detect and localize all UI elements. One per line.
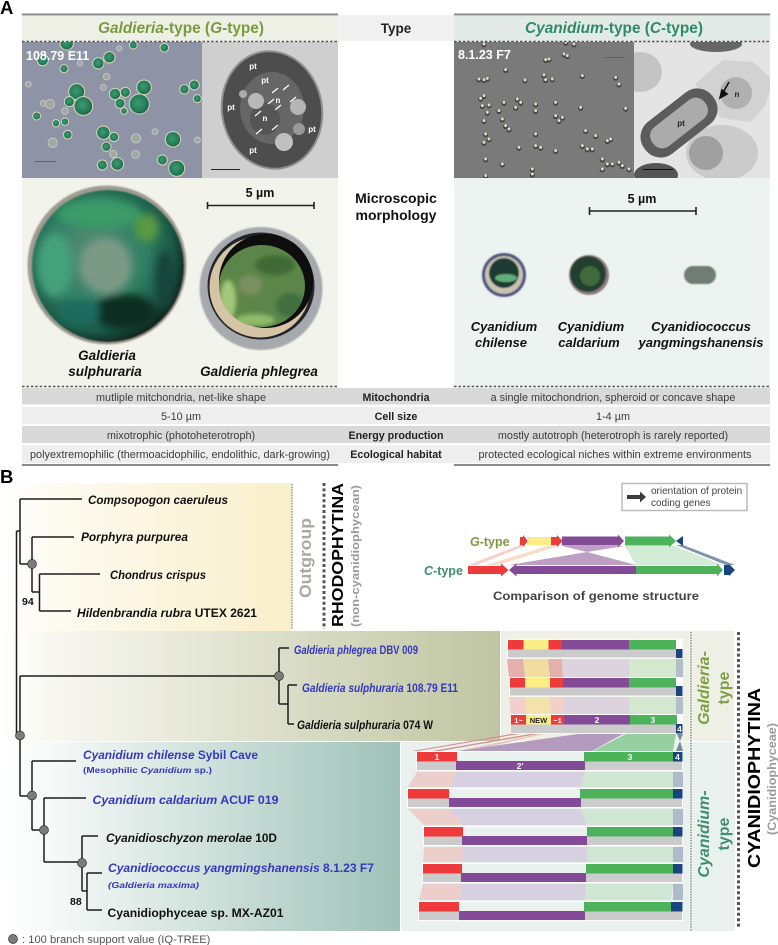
TEM: Galdieria cell: pt bbox=[308, 125, 316, 134]
Galdieria row 3: NEW bbox=[530, 716, 548, 725]
Galdieria row 1 bbox=[507, 639, 683, 658]
species labels: Cyanidium caldarium ACUF 019 bbox=[92, 795, 278, 807]
row: ecological habitat: Ecological habitat bbox=[350, 449, 442, 461]
cell: Galdieria sulphuraria bbox=[28, 186, 186, 344]
C-type genome bbox=[468, 564, 735, 576]
panel B bbox=[0, 466, 778, 945]
species labels: Cyanidioschyzon merolae 10D bbox=[106, 833, 277, 845]
row: cell size: 5-10 µm bbox=[161, 411, 201, 423]
TEM: Galdieria cell: pt bbox=[227, 103, 235, 112]
row: cell size: Cell size bbox=[375, 411, 417, 423]
species labels: Compsopogon caeruleus bbox=[88, 495, 228, 507]
background: Galdieria clade bbox=[0, 631, 500, 741]
panel letter B: B bbox=[0, 466, 13, 487]
Cyanidium row 1 bbox=[416, 751, 683, 771]
species labels: (Galdieria maxima) bbox=[108, 880, 199, 890]
Type header bbox=[338, 15, 454, 41]
TEM: Galdieria cell: pt bbox=[249, 62, 257, 71]
C-type label: C-type bbox=[424, 564, 463, 578]
row: mitochondria: mutliple mitchondria, net-like shape bbox=[96, 392, 266, 404]
row: mitochondria: a single mitochondrion, spheroid or concave shape bbox=[491, 392, 735, 404]
comparison caption: Comparison of genome structure bbox=[493, 589, 699, 603]
Galdieria row 3: 4 bbox=[677, 724, 682, 734]
Galdieria row 2 bbox=[509, 677, 683, 696]
light micrograph: Galdieria 108.79 E11: 108.79 E11 bbox=[26, 49, 89, 63]
Cyanidium row 3 bbox=[423, 826, 683, 846]
TEM: Galdieria cell: pt bbox=[249, 146, 257, 155]
row: ecological habitat: protected ecological niches within extreme environments bbox=[478, 449, 752, 461]
TEM: Cyanidium cell bbox=[634, 42, 770, 178]
G-type label: G-type bbox=[470, 535, 510, 549]
row: energy production: mostly autotroph (heterotroph is rarely reported) bbox=[498, 430, 728, 442]
Galdieria row 3: 3 bbox=[651, 715, 656, 725]
species labels bbox=[77, 495, 459, 920]
legend: gene orientation: coding genes bbox=[651, 498, 710, 509]
light micrograph: Cyanidium 8.1.23 F7: 8.1.23 F7 bbox=[458, 48, 511, 62]
species labels: Hildenbrandia rubra UTEX 2621 bbox=[77, 608, 258, 620]
support values: 88 bbox=[70, 896, 82, 908]
scale bar 5 µm, Galdieria bbox=[208, 186, 314, 209]
label: CYANIDIOPHYTINA: CYANIDIOPHYTINA bbox=[744, 688, 764, 868]
row: energy production bbox=[107, 430, 728, 442]
label: non-cyanidiophycean: (non-cyanidiophycean) bbox=[350, 485, 362, 627]
label: Cyanidiococcus yangmingshanensis: yangmingshanensis bbox=[638, 335, 763, 350]
label: Galdieria phlegrea: Galdieria phlegrea bbox=[200, 364, 318, 379]
Galdieria row 3: 2 bbox=[595, 715, 600, 725]
label: Microscopic morphology: morphology bbox=[356, 207, 437, 223]
label: Cyanidium caldarium: Cyanidium bbox=[558, 319, 625, 334]
TEM: Galdieria cell: pt bbox=[261, 76, 269, 85]
background: outgroup bbox=[0, 483, 292, 631]
Cyanidium header: Cyanidium-type (C-type) bbox=[525, 20, 703, 37]
comparison table bbox=[22, 388, 770, 466]
background: Cyanidium clade bbox=[0, 742, 400, 931]
panel: Cyanidium morphology bbox=[454, 178, 770, 386]
label: Galdieria sulphuraria: sulphuraria bbox=[68, 364, 142, 379]
TEM: Cyanidium cell: pt bbox=[677, 119, 685, 128]
scale bar 5 µm, Cyanidium bbox=[590, 192, 696, 215]
label: Galdieria sulphuraria: Galdieria bbox=[78, 348, 136, 363]
support values: 94 bbox=[22, 596, 34, 608]
Galdieria header: Galdieria-type (G-type) bbox=[98, 20, 264, 37]
cell: Cyanidium chilense bbox=[482, 253, 526, 297]
genome synteny: Galdieria rows bbox=[507, 639, 683, 734]
species labels: Cyanidiococcus yangmingshanensis 8.1.23 F7 bbox=[108, 863, 374, 875]
row: ecological habitat bbox=[30, 449, 752, 461]
Cyanidium row 2 bbox=[407, 788, 683, 808]
scale bar 5 µm, Galdieria: 5 µm bbox=[246, 186, 274, 200]
Cyanidium row 5 bbox=[418, 901, 683, 921]
species labels: Cyanidiophyceae sp. MX-AZ01 bbox=[108, 908, 284, 920]
cell: Galdieria phlegrea bbox=[200, 227, 322, 350]
cell: Cyanidiococcus yangmingshanensis bbox=[684, 266, 716, 284]
label: type (Cyanidium): type bbox=[716, 817, 733, 850]
row: energy production: Energy production bbox=[348, 430, 444, 442]
Cyanidium row 1: 1 bbox=[435, 752, 440, 762]
Galdieria row 3: 1~ bbox=[514, 716, 523, 725]
row: energy production: mixotrophic (photoheterotroph) bbox=[107, 430, 255, 442]
species labels: Galdieria sulphuraria 074 W bbox=[297, 720, 433, 732]
legend: gene orientation: orientation of protein bbox=[651, 486, 742, 497]
species labels: Chondrus crispus bbox=[110, 570, 206, 582]
species labels: Porphyra purpurea bbox=[81, 532, 189, 544]
support values bbox=[22, 596, 82, 908]
label: type (Galdieria): type bbox=[716, 671, 733, 704]
Galdieria header bbox=[22, 14, 338, 41]
row: cell size bbox=[161, 411, 630, 423]
genome structure comparison bbox=[424, 534, 735, 603]
genome synteny: Cyanidium rows bbox=[407, 751, 683, 921]
species labels: Galdieria sulphuraria 108.79 E11 bbox=[302, 683, 459, 695]
legend: gene orientation bbox=[622, 484, 747, 510]
support nodes bbox=[16, 560, 284, 868]
ribbons bbox=[468, 545, 735, 565]
row: cell size: 1-4 µm bbox=[596, 411, 630, 423]
Type header: Type bbox=[381, 21, 412, 36]
label: Cyanidiococcus yangmingshanensis: Cyanidiococcus bbox=[651, 319, 751, 334]
cell: Cyanidium caldarium bbox=[569, 255, 609, 295]
label: Microscopic morphology: Microscopic bbox=[355, 190, 437, 206]
label: Cyanidium caldarium: caldarium bbox=[558, 335, 620, 350]
Cyanidium row 4 bbox=[422, 863, 683, 883]
G-type genome bbox=[520, 534, 683, 548]
label: RHODOPHYTINA: RHODOPHYTINA bbox=[330, 483, 347, 627]
panel: Galdieria morphology bbox=[22, 178, 338, 386]
species labels: (Mesophilic Cyanidium sp.) bbox=[83, 765, 212, 775]
label: Cyanidium chilense: chilense bbox=[475, 335, 527, 350]
light micrograph: Cyanidium 8.1.23 F7 bbox=[454, 42, 634, 178]
TEM: Galdieria cell bbox=[202, 42, 338, 178]
row: mitochondria: Mitochondria bbox=[362, 392, 431, 404]
row: ecological habitat: polyextremophilic (thermoacidophilic, endolithic, dark-growing) bbox=[30, 449, 330, 461]
ribbons between Cyanidium rows bbox=[408, 772, 683, 900]
scale bar 5 µm, Cyanidium: 5 µm bbox=[628, 192, 656, 206]
Cyanidium row 1: 2' bbox=[517, 761, 523, 771]
ribbons: Galdieria to Cyanidium bbox=[412, 734, 683, 751]
light micrograph: Galdieria 108.79 E11 bbox=[22, 37, 202, 178]
background: Galdieria genome panel bbox=[501, 631, 734, 741]
background: Cyanidium genome panel bbox=[401, 742, 735, 931]
label: Outgroup: Outgroup bbox=[296, 518, 315, 598]
TEM: Cyanidium cell: n bbox=[735, 90, 740, 99]
ribbons between Galdieria rows bbox=[507, 659, 683, 714]
Cyanidium header bbox=[454, 14, 770, 41]
phylogenetic tree bbox=[16, 499, 297, 910]
Cyanidium row 1: 4 bbox=[675, 752, 680, 762]
Galdieria row 3: ~1 bbox=[553, 716, 562, 725]
Cyanidium row 1: 3 bbox=[628, 752, 633, 762]
species labels: Galdieria phlegrea DBV 009 bbox=[294, 645, 418, 657]
label: Cyanidium-: Cyanidium- bbox=[696, 790, 713, 878]
Galdieria row 3 bbox=[511, 714, 683, 734]
label: Cyanidium chilense: Cyanidium bbox=[471, 319, 538, 334]
TEM: Galdieria cell: n bbox=[276, 96, 281, 105]
species labels: Cyanidium chilense Sybil Cave bbox=[83, 750, 258, 762]
label: Galdieria-: Galdieria- bbox=[696, 651, 713, 725]
panel A bbox=[0, 0, 773, 466]
row: mitochondria bbox=[96, 392, 735, 404]
TEM: Galdieria cell: n bbox=[263, 114, 268, 123]
